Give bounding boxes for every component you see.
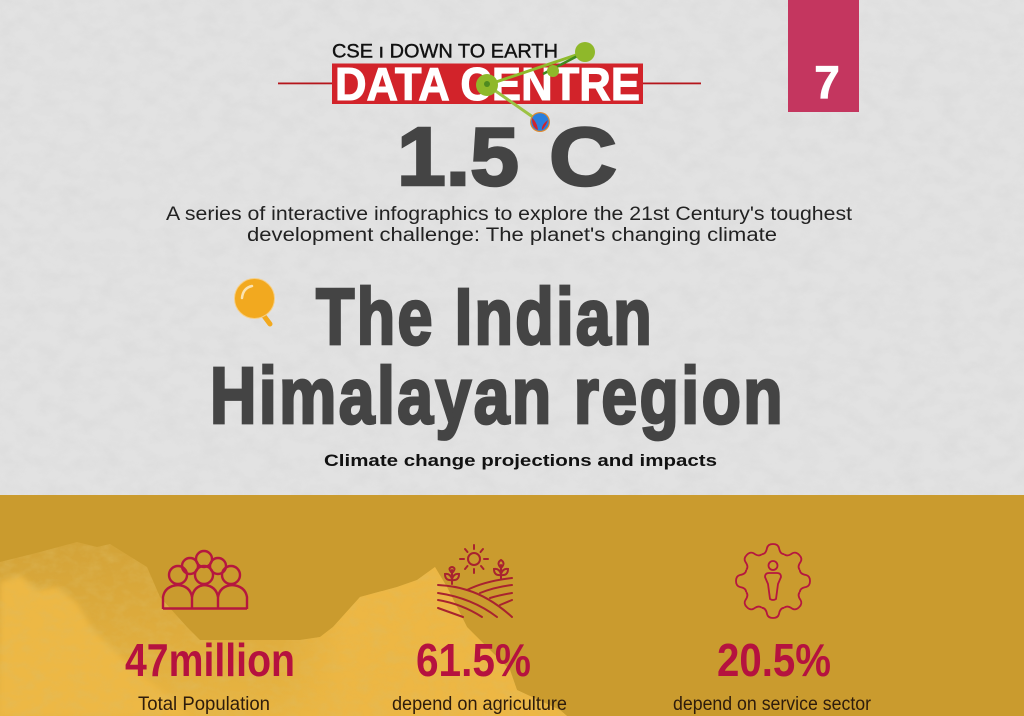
panel: paper background (0, 0, 1024, 496)
icon: farm fields and sun (438, 545, 512, 617)
heading: 1.5 degrees C: 1.5 (397, 110, 519, 203)
stat: total population: Total Population (138, 694, 270, 715)
icon: gear with person (736, 544, 810, 618)
stat: total population (125, 634, 295, 715)
heading: 1.5 degrees C (397, 110, 617, 203)
text block: series description: A series of interactive infographics to explore the 21st Century's toughest (166, 204, 853, 225)
stat: agriculture (392, 634, 567, 715)
subheading: climate change projections: Climate change projections and impacts (324, 451, 717, 470)
stat: service sector: 20.5% (717, 634, 831, 686)
illustration: mountains (0, 540, 580, 716)
icon: magnifying glass (234, 278, 274, 324)
icon: group of people (163, 551, 247, 609)
text block: series description: development challenge: The planet's changing climate (247, 225, 777, 246)
title: The Indian Himalayan region: The Indian (316, 272, 654, 361)
title: The Indian Himalayan region (210, 272, 785, 440)
text block: series description (166, 204, 853, 246)
badge: number 7 (788, 0, 859, 112)
logo: CSE Down To Earth Data Centre (278, 40, 701, 132)
stat: service sector (673, 634, 872, 715)
stat: service sector: depend on service sector (673, 694, 872, 715)
stat: total population: 47million (125, 634, 295, 686)
badge: number 7: 7 (814, 56, 840, 108)
stat: agriculture: depend on agriculture (392, 694, 567, 715)
heading: 1.5 degrees C: C (549, 110, 617, 203)
panel: gold statistics band (0, 495, 1024, 716)
logo: CSE Down To Earth Data Centre: CSE ı DOWN TO EARTH (332, 40, 558, 62)
logo: CSE Down To Earth Data Centre: DATA CENTRE (335, 58, 640, 110)
stat: agriculture: 61.5% (416, 634, 531, 686)
title: The Indian Himalayan region: Himalayan region (210, 351, 785, 440)
